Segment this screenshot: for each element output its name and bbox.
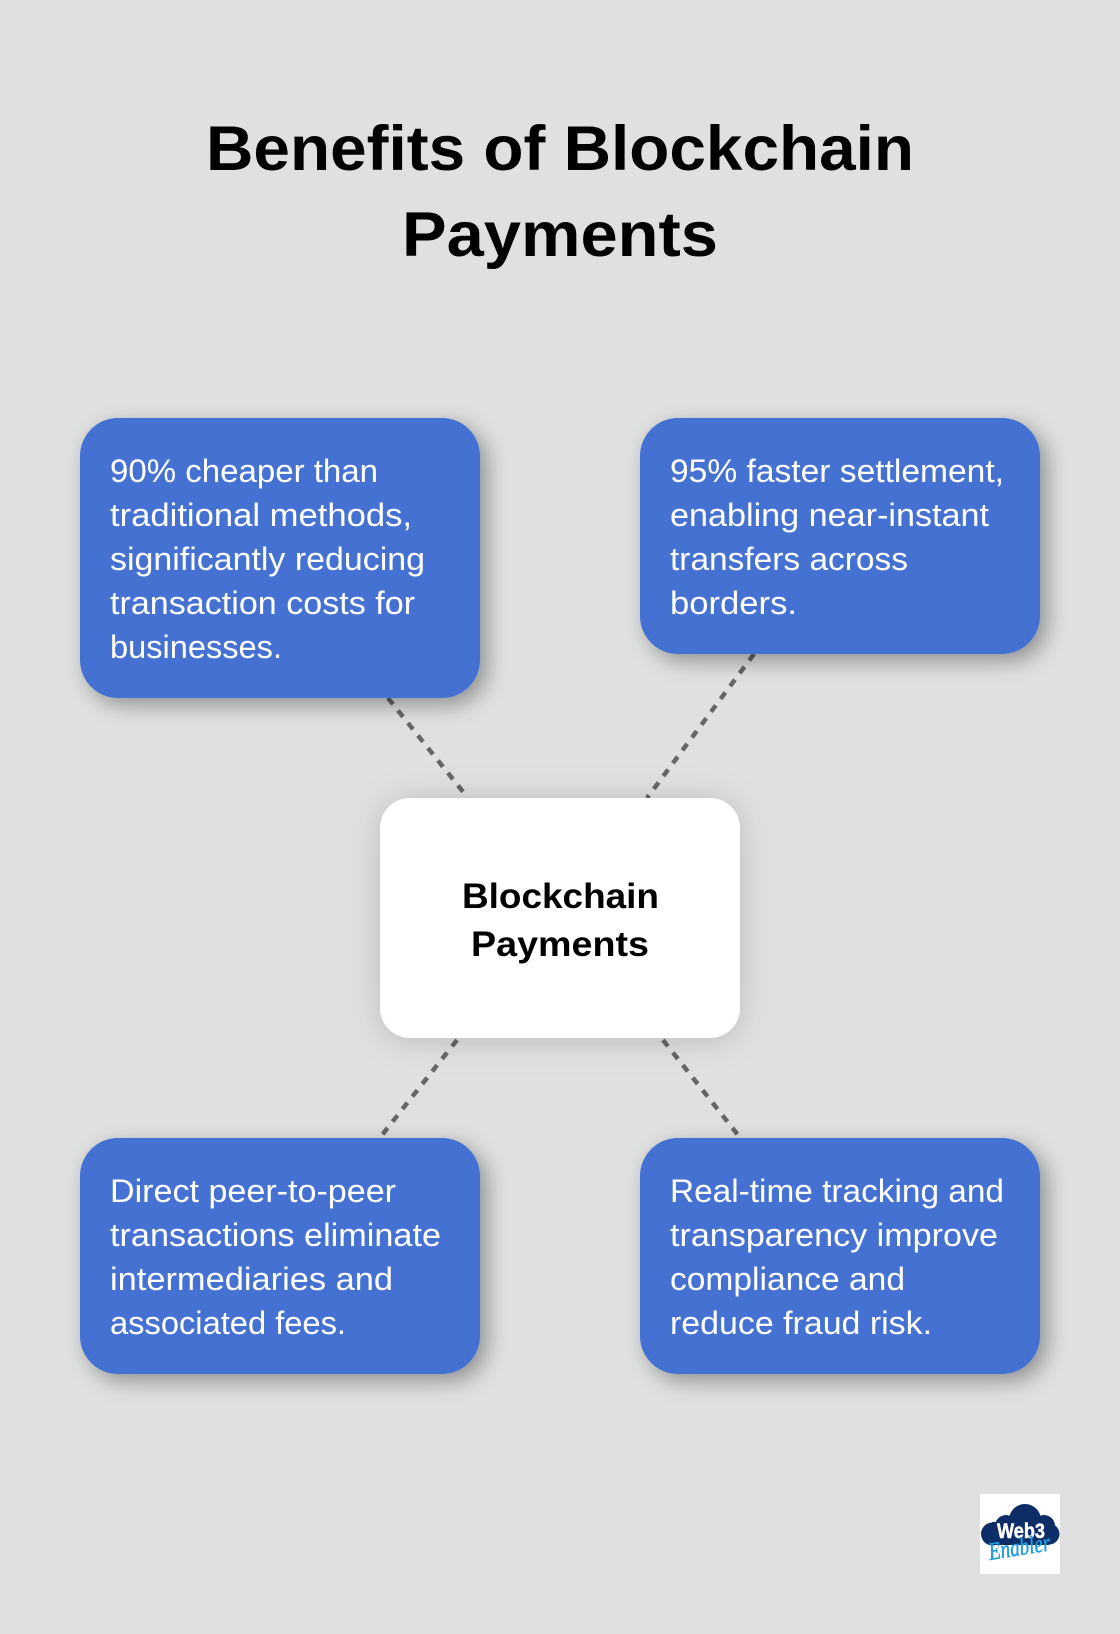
panel: settlement speed: transfers across [670,541,908,577]
panel: peer to peer: transactions eliminate [110,1217,441,1253]
panel: cost savings: traditional methods, [110,497,412,533]
panel: transparency: compliance and [670,1261,905,1297]
panel: peer to peer [80,1138,480,1374]
panel: peer to peer: associated fees. [110,1305,346,1341]
logo: Web3 Enabler: Web3 [997,1520,1045,1543]
panel: transparency: Real-time tracking and [670,1173,1004,1209]
panel: settlement speed: enabling near-instant [670,497,989,533]
title [206,114,914,270]
center node: blockchain payments: Blockchain [462,877,659,916]
panel: settlement speed: 95% faster settlement, [670,453,1004,489]
panel: settlement speed: borders. [670,585,797,621]
panel: transparency: reduce fraud risk. [670,1305,932,1341]
panel: transparency [640,1138,1040,1374]
title: Benefits of Blockchain [206,114,914,184]
panel: cost savings: 90% cheaper than [110,453,378,489]
panel: settlement speed [640,418,1040,654]
logo: Web3 Enabler [980,1494,1060,1574]
dashed connectors [382,654,754,1135]
center node: blockchain payments: Payments [471,925,649,964]
panel: cost savings [80,418,480,698]
logo: Web3 Enabler: Enabler [986,1530,1052,1566]
panel: peer to peer: Direct peer-to-peer [110,1173,396,1209]
panel: cost savings: businesses. [110,629,282,665]
panel: cost savings: transaction costs for [110,585,415,621]
panel: cost savings: significantly reducing [110,541,425,577]
panel: peer to peer: intermediaries and [110,1261,393,1297]
title: Payments [402,200,718,270]
panel: transparency: transparency improve [670,1217,998,1253]
center node: blockchain payments [380,798,740,1038]
